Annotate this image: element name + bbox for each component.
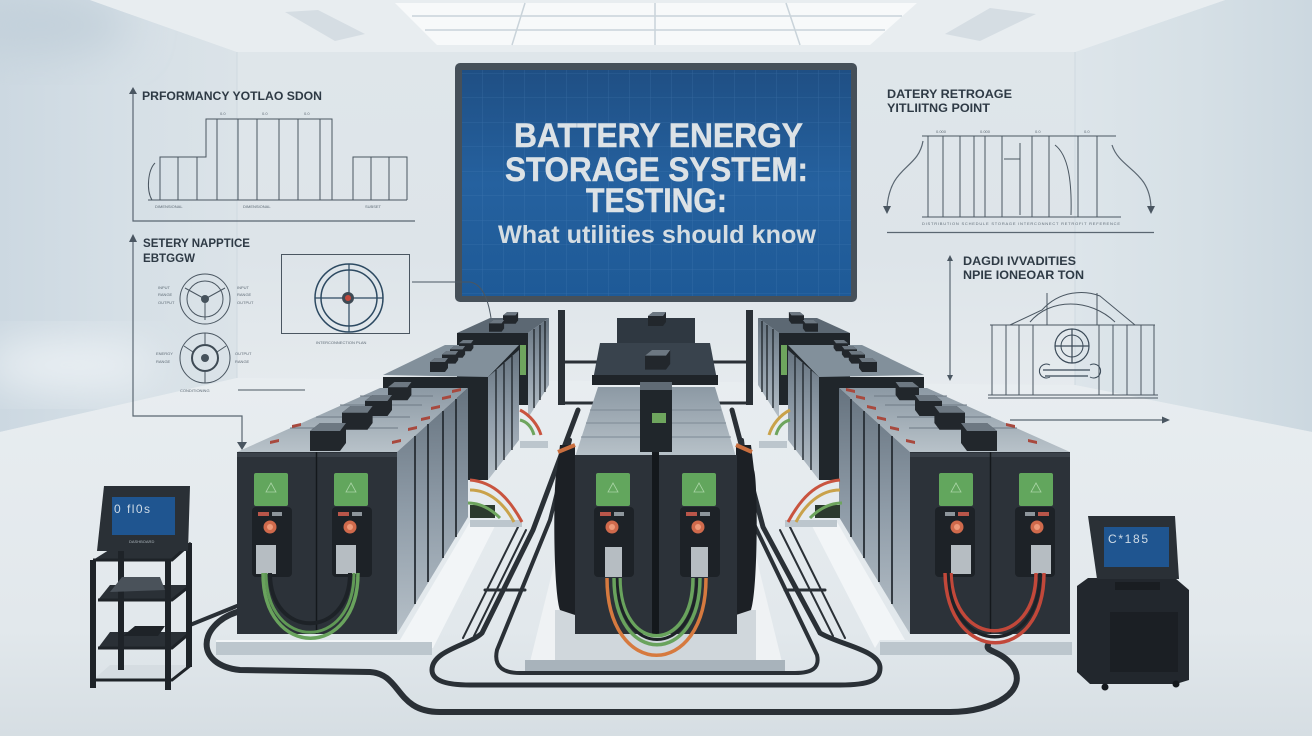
chart: performance: 0.0 <box>262 111 268 116</box>
chart: performance: DIMENSIONAL <box>243 204 271 209</box>
cables: right pair <box>945 573 1044 643</box>
chart: storage columns: 0.0 <box>1035 129 1041 134</box>
chart: performance: 0.0 <box>304 111 310 116</box>
diagram subheading: EBTGGW <box>143 251 196 265</box>
chart subheading: YITLIITNG POINT <box>887 101 991 115</box>
chart: storage columns: 0.000 <box>936 129 947 134</box>
floor cables <box>190 410 1017 712</box>
target diagram box: INTERCONNECTION PLAN <box>316 340 367 345</box>
diagram heading: SETERY NAPPTICE <box>143 236 250 250</box>
chart: storage columns: 0.0 <box>1084 129 1090 134</box>
floor platforms <box>216 500 1072 672</box>
side cables: right <box>769 410 842 522</box>
diagram: enclosure <box>947 254 1170 424</box>
chart heading: DATERY RETROAGE <box>887 87 1012 101</box>
chart heading: PRFORMANCY YOTLAO SDON <box>142 89 322 103</box>
chart: circular diagrams: INPUT <box>158 285 171 290</box>
side cables: left <box>468 410 541 522</box>
battery row: right <box>758 312 1070 634</box>
subtitle: What utilities should know <box>498 221 817 249</box>
chart: storage columns: 0.000 <box>980 129 991 134</box>
display screen <box>455 63 857 302</box>
center cables <box>607 578 706 655</box>
target diagram box <box>282 254 491 345</box>
chart: circular diagrams: OUTPUT <box>237 300 254 305</box>
chart: circular diagrams: INPUT <box>237 285 250 290</box>
monitor: right cabinet <box>1077 516 1189 690</box>
monitor reading: C*185 <box>1108 532 1148 546</box>
chart: performance: 0.0 <box>220 111 226 116</box>
cables: left pair <box>263 573 358 638</box>
chart: circular diagrams: ENERGY <box>156 351 173 356</box>
chart: circular diagrams: RANGE <box>156 359 171 364</box>
chart: circular diagrams: RANGE <box>237 292 252 297</box>
title: BATTERY ENERGY <box>514 117 803 155</box>
chart: circular diagrams: RANGE <box>235 359 250 364</box>
diagram subheading: NPIE IONEOAR TON <box>963 268 1084 282</box>
monitor: left cart <box>93 486 191 690</box>
title line 3: TESTING: <box>586 182 727 220</box>
chart: performance: DIMENSIONAL <box>155 204 183 209</box>
battery row: left <box>237 312 549 634</box>
chart: storage columns <box>883 87 1155 232</box>
monitor: left cart: DASHBOARD <box>129 539 154 544</box>
chart: circular diagrams: OUTPUT <box>158 300 175 305</box>
diagram heading: DAGDI IVVADITIES <box>963 254 1076 268</box>
ceiling light panel <box>285 3 1036 45</box>
chart: circular diagrams: OUTPUT <box>235 351 252 356</box>
monitor reading: 0 fl0s <box>114 502 150 516</box>
chart: performance <box>129 87 415 221</box>
chart: performance: SUBSET <box>365 204 382 209</box>
battery row: center <box>554 310 757 655</box>
chart: circular diagrams <box>129 234 305 450</box>
chart: circular diagrams: RANGE <box>158 292 173 297</box>
title line 2: STORAGE SYSTEM: <box>505 151 808 189</box>
chart: storage columns: DISTRIBUTION SCHEDULE STORAGE INTERCONNECT RETROFIT REFERENCE <box>922 221 1120 226</box>
chart: circular diagrams: CONDITIONING <box>180 388 210 393</box>
